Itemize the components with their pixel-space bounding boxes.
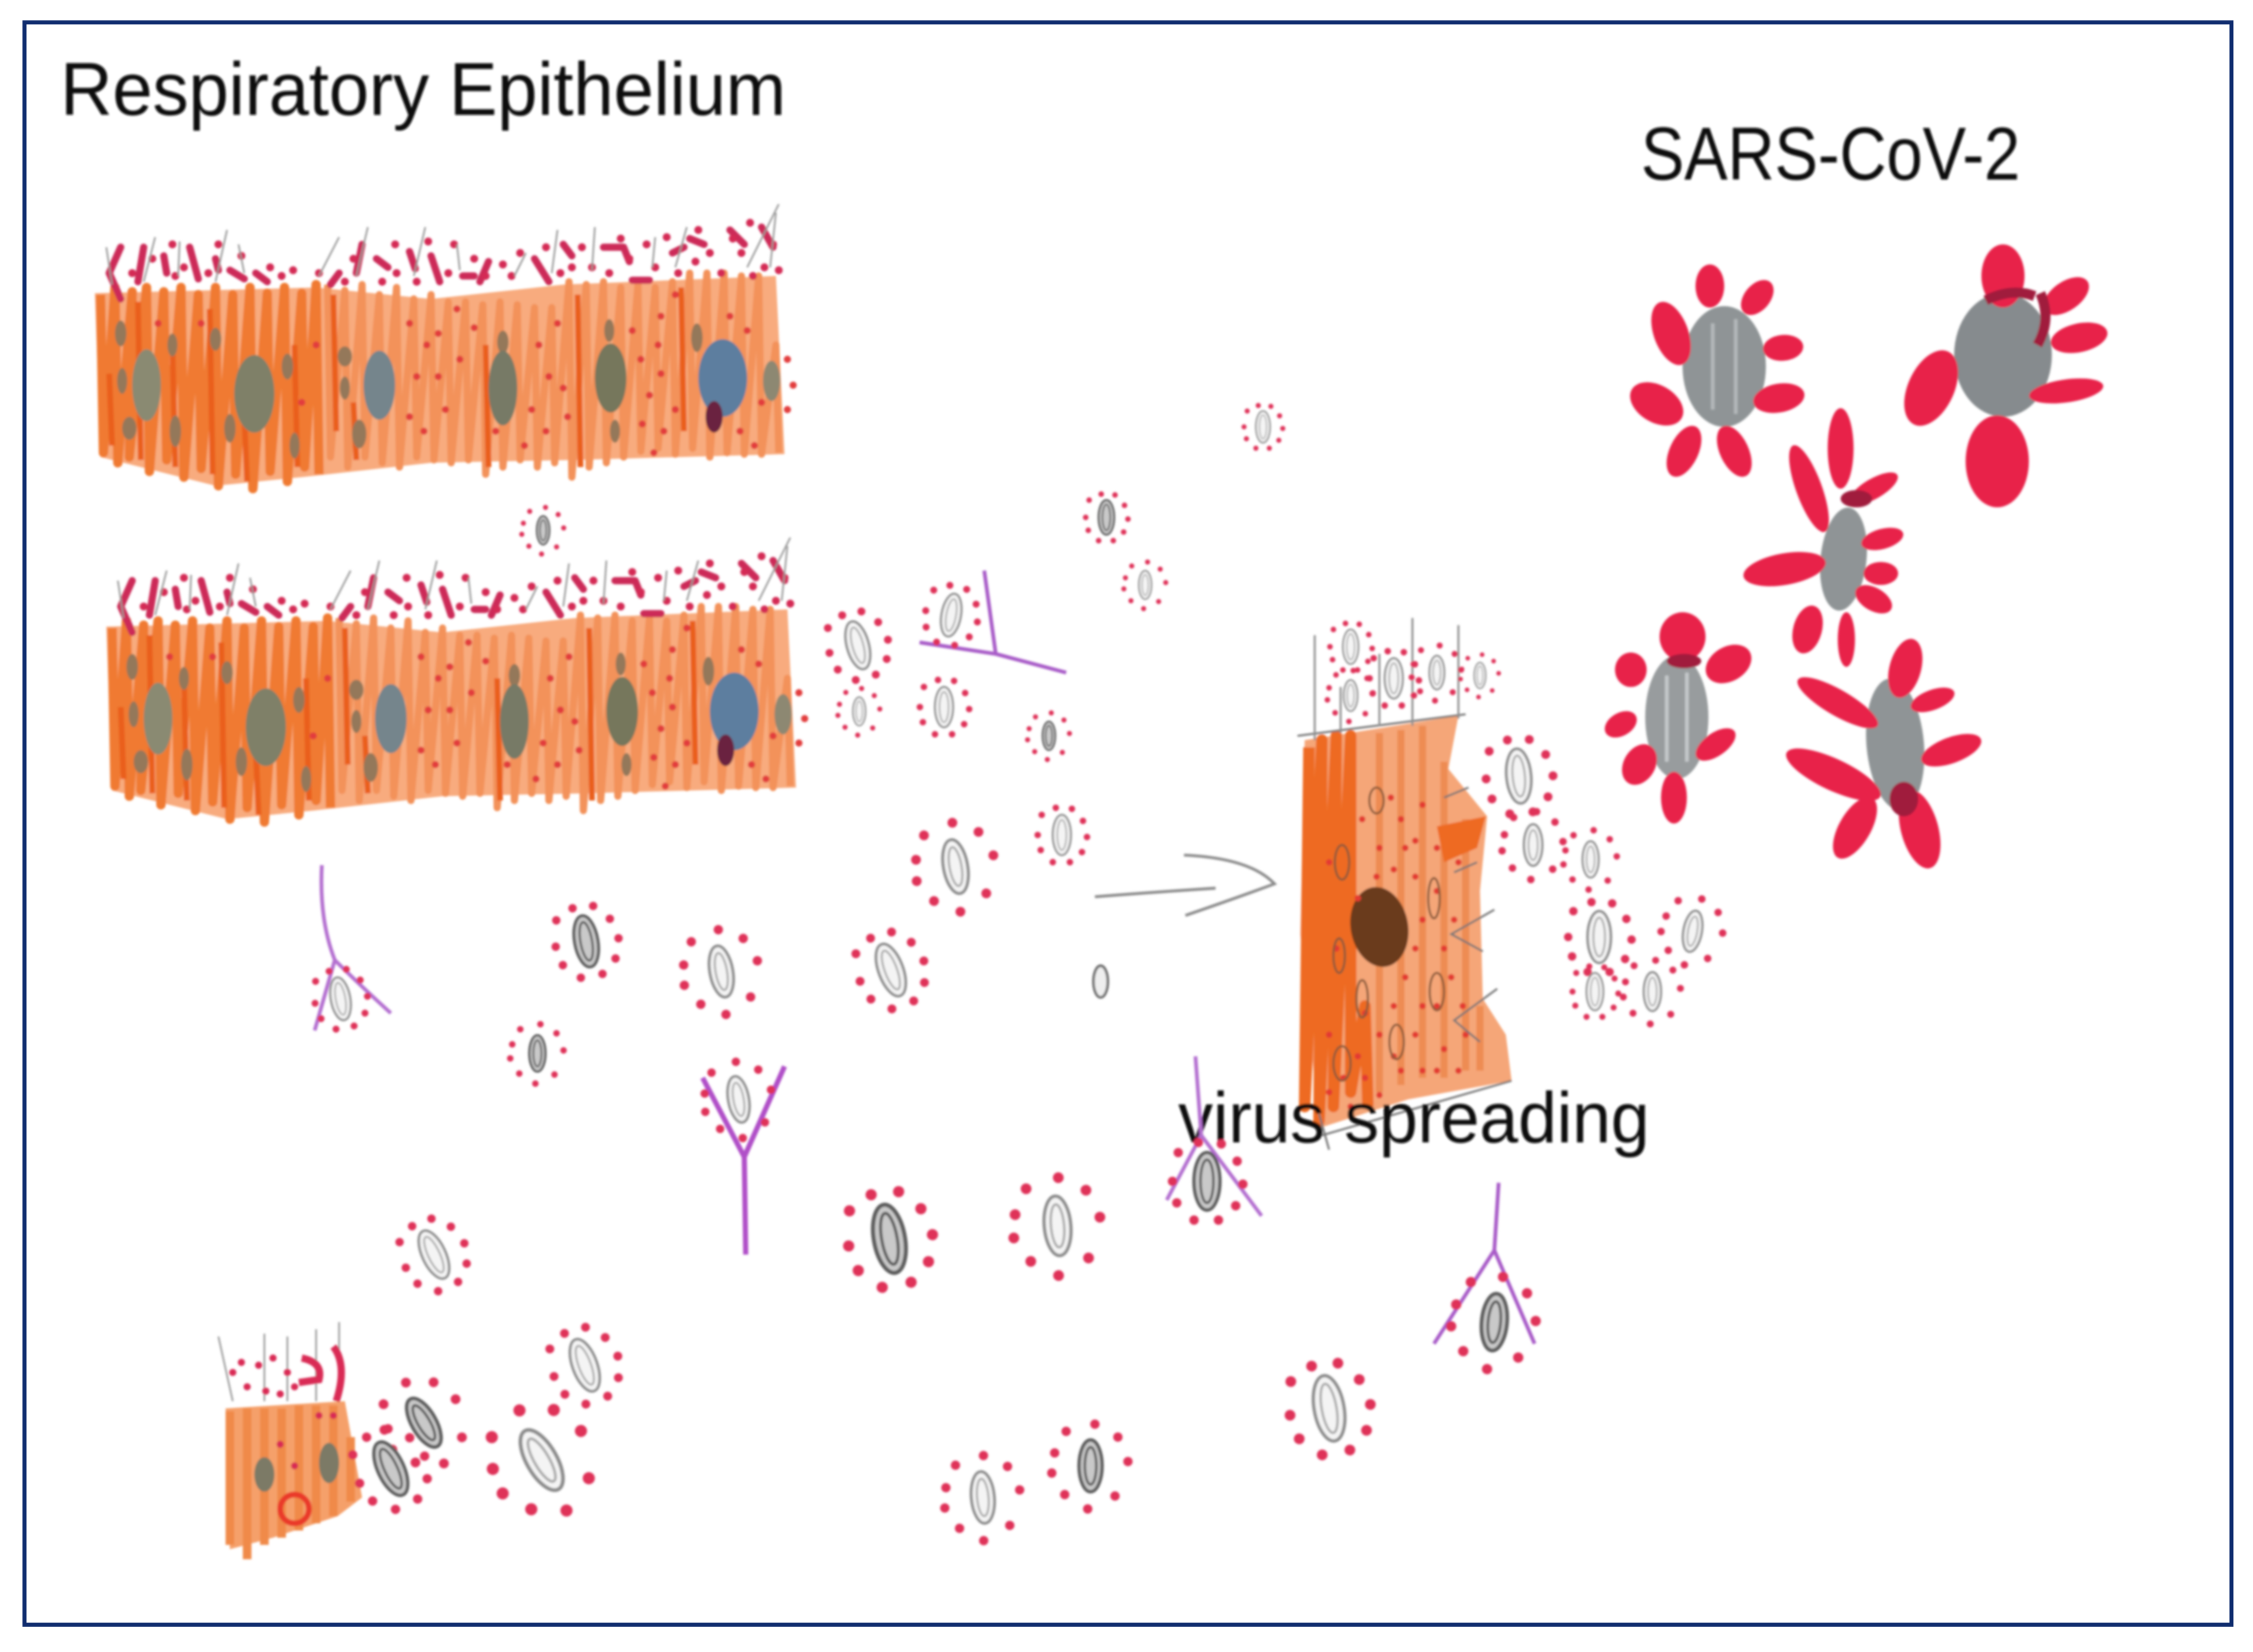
virion <box>1282 1357 1378 1459</box>
purple host receptor 1 <box>315 865 391 1030</box>
virion <box>1052 1424 1128 1509</box>
virion <box>1369 651 1419 705</box>
virion <box>343 1418 440 1519</box>
virion cluster <box>310 406 1728 1544</box>
virion <box>1038 808 1087 862</box>
virion <box>1009 1175 1105 1279</box>
virion <box>921 582 983 648</box>
virion <box>1330 623 1372 670</box>
virion <box>367 1365 480 1482</box>
virion <box>1448 1273 1539 1373</box>
heading: SARS-CoV-2: SARS-CoV-2 <box>1641 113 2020 196</box>
virion <box>1027 713 1070 759</box>
purple host receptor 2 <box>702 1066 785 1255</box>
infected cell <box>1297 618 1512 1150</box>
virion <box>550 902 624 981</box>
virion <box>1502 812 1563 880</box>
virion <box>1568 902 1631 972</box>
SARS-CoV-2 virus 1 <box>1622 265 1807 482</box>
title: Respiratory Epithelium: Respiratory Epithelium <box>60 48 786 131</box>
virion <box>1412 646 1461 700</box>
virion <box>471 1389 611 1534</box>
virion <box>940 1453 1024 1544</box>
virion <box>676 924 765 1021</box>
virion <box>310 965 372 1032</box>
virion <box>1623 960 1681 1024</box>
virion <box>1244 406 1282 448</box>
SARS-CoV-2 virus 4 <box>1600 612 1758 824</box>
virion <box>908 817 1002 918</box>
purple host receptor 4 <box>1434 1183 1535 1343</box>
small cell <box>218 1322 362 1559</box>
purple host receptor 5 <box>919 571 1066 672</box>
virus spreading label: virus spreading <box>1178 1078 1650 1158</box>
virion <box>698 1057 778 1144</box>
SARS-CoV-2 virus 5 <box>1780 635 1986 873</box>
virion <box>510 1024 564 1084</box>
virion <box>522 508 564 554</box>
SARS-CoV-2 virus 2 <box>1893 244 2110 508</box>
virion <box>838 688 880 735</box>
virion <box>821 605 896 685</box>
virion <box>542 1319 629 1411</box>
virion <box>1460 655 1499 697</box>
virion <box>847 923 936 1016</box>
epithelium row 2 <box>106 538 804 822</box>
virion <box>1656 893 1728 971</box>
purple host receptor 3 <box>1167 1056 1261 1216</box>
virion <box>1572 967 1618 1017</box>
virion <box>841 1185 940 1292</box>
virion <box>391 1209 478 1299</box>
particle without spikes <box>1094 966 1108 997</box>
virion <box>1124 562 1165 609</box>
virion <box>1483 736 1556 815</box>
virion <box>1328 670 1373 722</box>
epithelium row 1 <box>95 204 793 488</box>
SARS-CoV-2 virus 3 <box>1741 408 1906 667</box>
virion <box>920 680 969 734</box>
virion <box>1564 830 1617 889</box>
arrow <box>1095 855 1274 915</box>
virion <box>1085 494 1128 540</box>
virion <box>1172 1142 1243 1220</box>
